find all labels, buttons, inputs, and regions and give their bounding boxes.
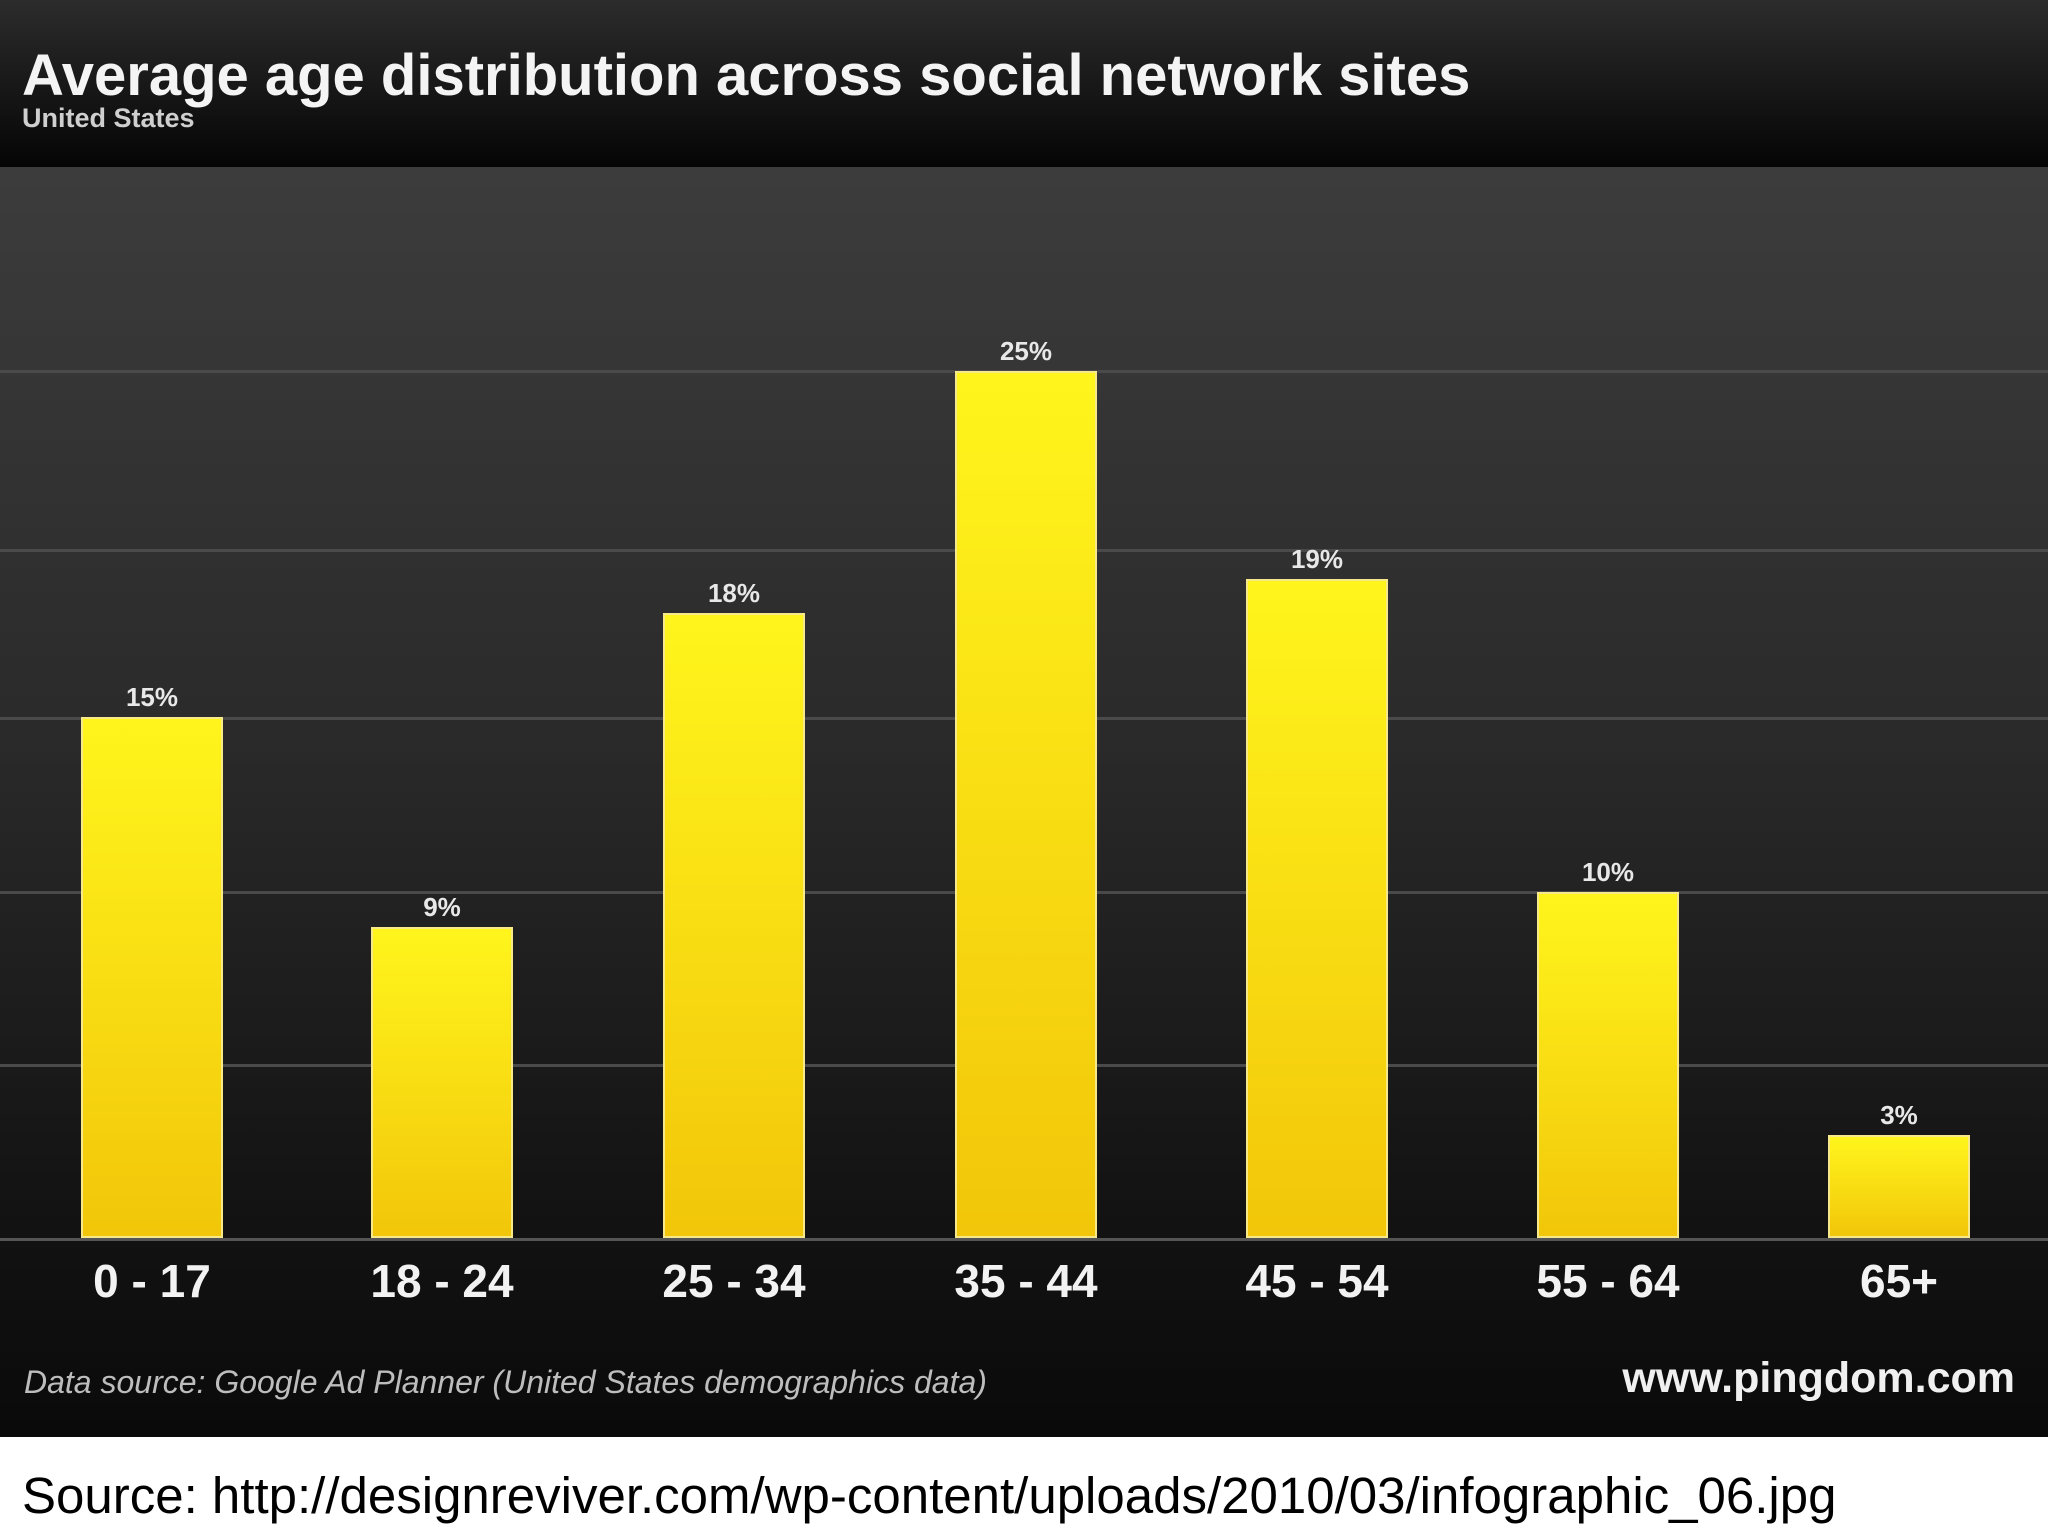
bar chart: 3%	[1880, 1100, 1918, 1130]
x axis labels: 0 - 17	[93, 1255, 211, 1307]
x axis labels: 45 - 54	[1245, 1255, 1389, 1307]
x axis labels	[93, 1255, 1938, 1307]
bar 45-54	[1246, 579, 1388, 1238]
x axis labels: 55 - 64	[1536, 1255, 1680, 1307]
bar 35-44	[955, 371, 1097, 1238]
bar chart: 9%	[423, 892, 461, 922]
bar chart	[81, 336, 1970, 1238]
bar 25-34	[663, 613, 805, 1238]
bar chart: 15%	[126, 682, 178, 712]
bar 0-17	[81, 717, 223, 1238]
x axis labels: 65+	[1860, 1255, 1938, 1307]
data source note: Data source: Google Ad Planner (United States demographics data)	[24, 1364, 987, 1400]
subtitle: United States	[22, 103, 195, 133]
bar chart: 10%	[1582, 857, 1634, 887]
bar 55-64	[1537, 892, 1679, 1238]
bar 18-24	[371, 927, 513, 1238]
title: Average age distribution across social network sites	[22, 43, 1470, 108]
website credit: www.pingdom.com	[1622, 1354, 2015, 1402]
bar chart: 19%	[1291, 544, 1343, 574]
x axis labels: 18 - 24	[370, 1255, 514, 1307]
bar 65+	[1828, 1135, 1970, 1238]
x axis labels: 25 - 34	[662, 1255, 806, 1307]
header band	[0, 0, 2048, 167]
source caption: Source: http://designreviver.com/wp-content/uploads/2010/03/infographic_06.jpg	[22, 1467, 1836, 1524]
x axis labels: 35 - 44	[954, 1255, 1098, 1307]
bar chart: 25%	[1000, 336, 1052, 366]
bar chart: 18%	[708, 578, 760, 608]
